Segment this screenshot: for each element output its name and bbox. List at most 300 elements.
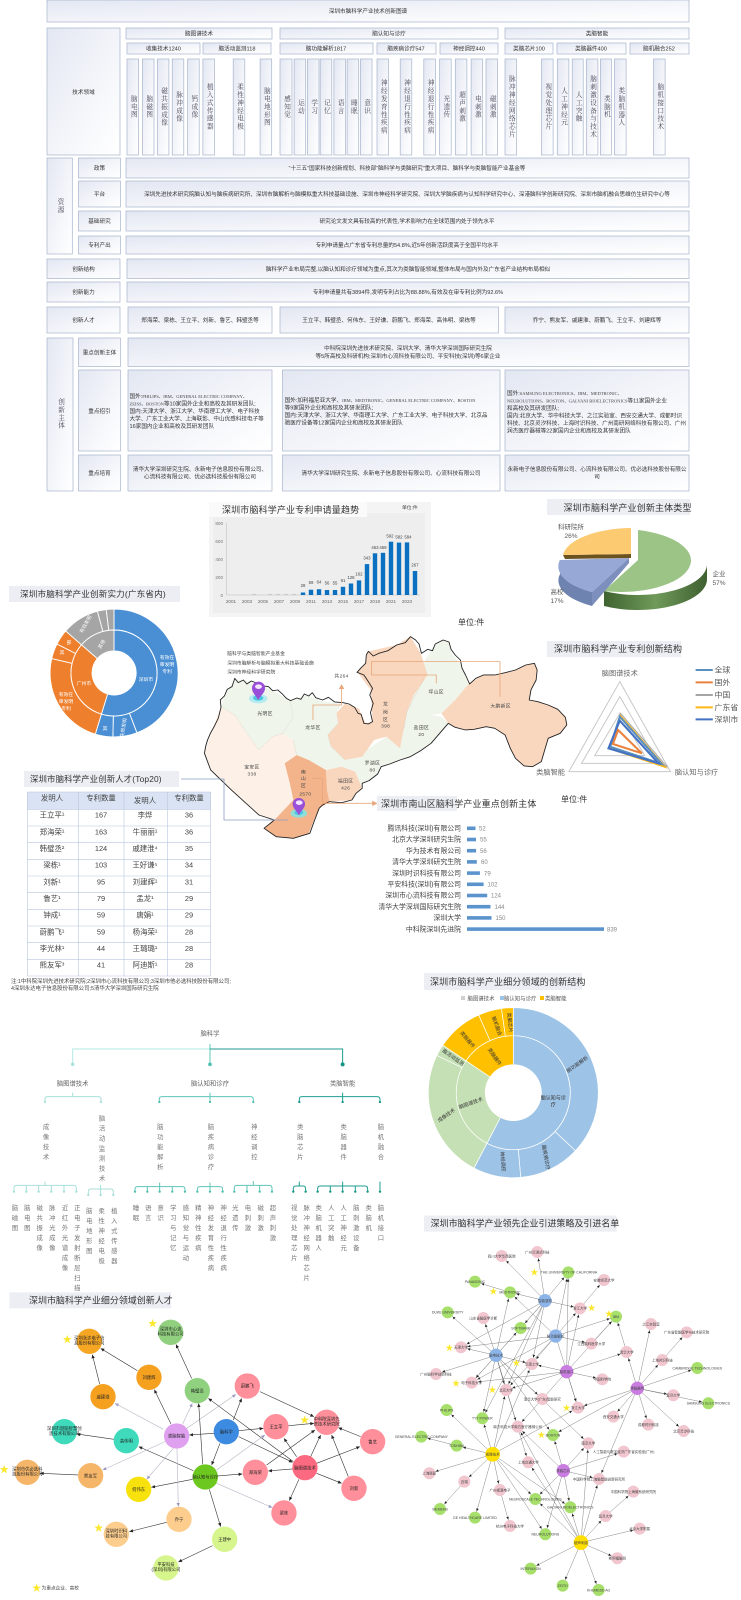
network labels: 脑机接口 xyxy=(560,1369,574,1374)
panel: innovation entities: 心流科技有限公司、优必选科技股份有限公司 xyxy=(144,472,256,480)
network labels: 广州视源电子 xyxy=(490,1487,511,1492)
panel: innovation entities: NEUROLUTIONS、BOSTON、GALVANI BIOELECTRONICS等11家国外企业 xyxy=(507,396,667,404)
bar chart: Nanshan key entities: 150 xyxy=(496,916,506,922)
panel: innovation talent: 郑海荣、梁栋、王立平、刘新、鲁艺、韩璧丞等 xyxy=(141,316,259,324)
tree diagram: brain science taxonomy: 脑机融合 xyxy=(376,1122,384,1163)
table: top 20 inventors: 王好谦⁵ xyxy=(132,861,158,870)
tree diagram: brain science taxonomy: 脑活动监测技术 xyxy=(97,1114,105,1185)
network labels: 技有限公司 xyxy=(106,1533,127,1540)
tree diagram: brain science taxonomy: 植入式传感器 xyxy=(110,1206,117,1268)
pie chart: innovation entity types: 26% xyxy=(564,533,578,540)
network labels: 之江实验室 xyxy=(642,1321,660,1326)
tree diagram: brain science taxonomy: 正电子发射断层扫描 xyxy=(73,1204,80,1294)
panel: innovation talent: 创新人才 xyxy=(72,316,95,324)
tree diagram: brain science taxonomy: 柔性神经电极 xyxy=(97,1206,104,1268)
legend: 脑图谱技术 xyxy=(468,994,495,1002)
panel: resources: 研究论文发文具有较高的代表性,学术影响力在全球范围内处于领先水平 xyxy=(320,217,495,225)
bar chart: Nanshan key entities: 平安科技(深圳)有限公司 xyxy=(388,880,461,888)
tree diagram: brain science taxonomy: 人工神经元 xyxy=(339,1204,346,1254)
heading: entity types: 深圳市脑科学产业创新主体类型 xyxy=(564,502,692,513)
network labels: 成像技术 xyxy=(486,1452,500,1457)
network labels: 戚建淮 xyxy=(96,1393,110,1400)
panel: innovation talent xyxy=(47,307,689,333)
network labels: 上海交通大学 xyxy=(518,1460,539,1465)
pie chart: innovation entity types: 57% xyxy=(712,580,726,587)
tree diagram: brain science taxonomy: 类脑智能 xyxy=(330,1078,356,1087)
panel: technology fields: 磁刺激 xyxy=(488,94,497,119)
network labels: 智能感知 xyxy=(538,1298,552,1303)
network labels: PHILIPS xyxy=(440,1408,454,1412)
network labels: 斯坦福脑研 xyxy=(609,1556,627,1561)
table: top 20 inventors: 郑海荣¹ xyxy=(40,827,65,836)
network labels: 南方科技大学南方医疗器械公司 xyxy=(493,1424,543,1429)
bar chart: Nanshan key entities xyxy=(377,796,618,933)
tree diagram: brain science taxonomy: 光遗传 xyxy=(231,1203,238,1234)
bar chart: Nanshan key entities: 56 xyxy=(480,849,487,855)
tree diagram: brain science taxonomy: 人工突触 xyxy=(327,1204,334,1244)
radar chart: patent innovation structure: 类脑智能 xyxy=(536,767,565,776)
bar chart: patent application trend: 584 xyxy=(404,534,412,540)
panel: innovation talent: 乔宁、熊友军、戚建淮、蔚鹏飞、王立平、刘建辉等 xyxy=(533,316,662,324)
tree diagram: brain science taxonomy: 脑机接口 xyxy=(376,1203,384,1244)
panel: technology fields: 磁共振成像 xyxy=(160,86,168,127)
table: top 20 inventors: 阿迪斯¹ xyxy=(133,961,158,970)
network labels: 深圳市优必选科 xyxy=(12,1466,43,1473)
panel: technology fields xyxy=(47,28,689,155)
bar chart: patent application trend: 582 xyxy=(395,534,403,540)
sunburst: subfield innovation structure: 神经调控 xyxy=(498,1151,507,1172)
bar chart: patent application trend: 单位:件 xyxy=(402,504,418,511)
icons: key enterprise stars: ★ xyxy=(588,1304,596,1313)
district labels: 岗 xyxy=(383,708,388,715)
icon: map pin Nanshan xyxy=(291,798,307,818)
panel: innovation entities: 国内:天津大学、浙江大学、华南理工大学、广东工业大学、电子科技大学、北京品 xyxy=(285,411,488,419)
panel: innovation entities: 驰医疗设备等12家国内企业和高校及其研发团队 xyxy=(285,418,403,426)
panel: innovation entities: 清华大学深圳研究生院、永新电子信息股份有限公司、心流科技有限公司 xyxy=(301,469,481,477)
panel: innovation entities: 永新电子信息股份有限公司、心流科技有限公司、优必选科技股份有限公 xyxy=(507,465,687,473)
bar chart: Nanshan key entities: 102 xyxy=(488,882,498,888)
radar chart: patent innovation structure: 脑认知与诊疗 xyxy=(675,767,718,776)
panel: innovation entities: 清华大学深圳研究生院、永新电子信息股份有限公司、 xyxy=(133,465,267,473)
tree diagram: brain science taxonomy: 类脑芯片 xyxy=(296,1122,303,1163)
tree diagram: brain science taxonomy: 学习与记忆 xyxy=(169,1203,176,1254)
bar chart: patent application trend: 0 xyxy=(220,593,223,598)
tree diagram: brain science taxonomy: 磁刺激 xyxy=(256,1203,263,1234)
panel: technology fields: 脑电图 xyxy=(129,94,138,119)
footnote: 4深圳永达电子信息股份有限公司;5清华大学深圳国际研究生院 xyxy=(11,984,159,992)
network labels: 南京大学 xyxy=(581,1441,596,1446)
bar chart: patent application trend: 2011 xyxy=(306,599,316,604)
tree diagram: brain science taxonomy: 语言 xyxy=(144,1203,151,1224)
tree diagram: brain science taxonomy: 脑磁图 xyxy=(10,1203,18,1234)
sunburst: innovation strength in Guangdong: 有效发明 xyxy=(78,614,94,634)
network labels: 类脑智能 xyxy=(168,1433,186,1440)
network labels: IBM xyxy=(613,1315,619,1319)
sunburst: subfield innovation structure: 成像技术 xyxy=(436,1107,457,1124)
district labels: 80 xyxy=(370,768,376,774)
table: top 20 inventors: 34 xyxy=(185,861,193,870)
radar chart: patent innovation structure: 全球 xyxy=(715,665,731,675)
district labels: 区 xyxy=(383,717,388,723)
icon: map pin Guangming xyxy=(249,682,267,703)
sunburst: subfield innovation structure xyxy=(424,973,598,1178)
bar chart: patent application trend: 2017 xyxy=(354,599,365,604)
legend: 脑认知与诊疗 xyxy=(504,994,537,1002)
table: top 20 inventors: 29 xyxy=(185,911,193,920)
table: top 20 inventors: 孟龙¹ xyxy=(136,894,154,903)
panel: technology fields: 神经发育性疾病 xyxy=(379,78,388,135)
panel: technology fields: 学习 xyxy=(310,98,318,115)
panel: technology fields: 人工神经元 xyxy=(560,86,568,127)
table: top 20 inventors: 王璐璐¹ xyxy=(133,944,158,953)
network labels: 进技术研究院 xyxy=(314,1421,340,1428)
heading: Nanshan xyxy=(377,796,537,811)
table: top 20 inventors: 发明人 xyxy=(134,796,157,805)
district labels: 山 xyxy=(301,775,306,782)
network labels: 类脑芯片 xyxy=(556,1468,571,1473)
network: leading enterprises introduction list xyxy=(395,1216,731,1596)
bar chart: Nanshan key entities: 北京大学深圳研究生院 xyxy=(392,835,461,844)
network labels: 中国科学院上海微系统研究院 xyxy=(611,1489,656,1494)
network labels: 深圳市韶脑智慧创 xyxy=(47,1425,82,1432)
panel: innovation entities: 重点招引 xyxy=(88,407,111,415)
pie chart: innovation entity types: 企业 xyxy=(712,569,726,578)
panel: innovation entities: 16家国内企业和高校及其研发团队 xyxy=(130,422,214,430)
network labels: PANASONIC xyxy=(465,1280,486,1284)
network labels: 山东省脑医学诊断 xyxy=(469,1315,498,1320)
bar chart: patent application trend: 64 xyxy=(317,580,322,584)
tree diagram: brain science taxonomy: 脉冲神经网络芯片 xyxy=(302,1203,309,1284)
network labels: 梁栋 xyxy=(280,1510,289,1517)
district labels: 光明区 xyxy=(257,710,273,717)
sunburst: innovation strength in Guangdong: 专利 xyxy=(162,668,172,675)
legend: star meaning: ★ xyxy=(32,1583,41,1593)
panel: technology fields: 人工突触 xyxy=(574,90,582,123)
sunburst: innovation strength in Guangdong: 审发明 xyxy=(160,661,174,668)
network labels: DUKE UNIVERSITY xyxy=(432,1311,464,1315)
district labels: 大鹏新区 xyxy=(490,702,511,709)
sunburst: subfield innovation structure: 脑机融合 xyxy=(490,1016,503,1037)
pie chart: innovation entity types: 17% xyxy=(550,598,564,605)
panel: innovation entities: 创新主体 xyxy=(56,397,65,430)
network labels: 广州脑科学创新科技 xyxy=(420,1371,452,1376)
network labels: 电子科技大学 xyxy=(461,1380,483,1385)
network labels: BOSTON xyxy=(546,1433,561,1437)
icons: key enterprise stars xyxy=(0,1319,309,1533)
heading: radar xyxy=(547,641,682,657)
network labels: KHUMEDE AG xyxy=(587,1588,611,1592)
panel: technology fields: 类脑机器人 xyxy=(617,86,625,127)
table: top 20 inventors: 专利数量 xyxy=(174,794,204,802)
bar chart: Nanshan key entities: 中科院深圳先进院 xyxy=(406,924,461,933)
tree diagram: brain science taxonomy: 脑电地形图 xyxy=(85,1206,92,1258)
network labels: 蔚鹏飞 xyxy=(241,1383,254,1390)
panel: technology fields: 脉冲神经网络芯片 xyxy=(507,74,516,139)
pie chart: innovation entity types xyxy=(547,499,726,610)
network labels: 北京大学附属 xyxy=(629,1526,651,1531)
heading: subfield structure: 深圳市脑科学产业细分领域的创新结构 xyxy=(430,976,586,987)
network labels: 上海联影 xyxy=(422,1471,437,1476)
district: Longgang xyxy=(328,637,428,760)
tree diagram: brain science taxonomy: 脑图谱技术 xyxy=(57,1078,89,1087)
panel: technology fields: 类脑机 xyxy=(602,94,611,119)
panel: innovation capability xyxy=(47,282,689,302)
network labels: 深圳永达电子信 xyxy=(74,1335,105,1342)
tree diagram: brain science taxonomy: 脑疾病诊疗 xyxy=(206,1122,214,1173)
table: top 20 inventors: 167 xyxy=(95,811,107,820)
panel: resources: 深圳先进技术研究院脑认知与脑疾病研究所、深圳市脑解析与脑模拟重大科技基础设施、深圳市神经科学研究院、深圳大学脑疾病与认知科学研究中心、深港脑科学创新研究院、深圳市脑机融合思维仿生研究中心等 xyxy=(144,190,670,198)
bar chart: Nanshan key entities: 深圳大学 xyxy=(433,913,461,922)
icons: key enterprise stars: ★ xyxy=(148,1319,157,1329)
sunburst: subfield innovation structure: 类脑芯片 xyxy=(505,1012,514,1033)
bar chart: patent application trend: 592 xyxy=(386,534,394,538)
tree diagram: brain science taxonomy: 成像技术 xyxy=(41,1122,49,1163)
table: top 20 inventors: 王立平¹ xyxy=(40,811,65,820)
panel: technology fields: 类脑智能 xyxy=(586,30,609,38)
table: top 20 inventors: 刘建辉¹ xyxy=(133,877,158,886)
network labels: 深圳市心流 xyxy=(160,1326,182,1333)
sunburst: innovation strength in Guangdong: 专利 xyxy=(61,705,71,712)
radar chart: patent innovation structure: 广东省 xyxy=(715,702,738,712)
network labels: 人工智能与数字经济广东省实验室(广州) xyxy=(593,1449,654,1454)
tree diagram: brain science taxonomy: 脑功能解析 xyxy=(156,1122,163,1173)
district labels: 盐田区 xyxy=(414,724,429,731)
panel: innovation entities: ZEISS、BOSTON等10家国外企业和高校及其研发团队; xyxy=(130,400,256,408)
annotation: Guangming facilities: 脑科学与类脑智能产业基金 xyxy=(227,650,285,657)
network labels: 清华大学 xyxy=(620,1349,634,1354)
network labels: 平安科技 xyxy=(157,1561,175,1568)
bar chart: patent application trend: 28 xyxy=(301,583,306,588)
tree diagram: brain science taxonomy: 脉冲光成像 xyxy=(48,1203,55,1254)
panel: technology fields: 脑图谱技术 xyxy=(185,30,213,38)
network labels: 王立平 xyxy=(269,1423,283,1430)
network labels: 脑图谱技术 xyxy=(294,1464,316,1471)
tree diagram: brain science taxonomy: 神经退行性疾病 xyxy=(219,1203,226,1274)
bar chart: patent application trend: 600 xyxy=(215,539,223,544)
table: top 20 inventors: 专利数量 xyxy=(86,794,116,802)
panel: innovation entities: 国外:加利福尼亚大学、IBM、MEDTRONIC、GENERAL ELECTRIC COMPANY、BOSTON xyxy=(285,396,476,404)
panel: technology fields: 运动 xyxy=(296,99,305,115)
network labels: 浙江大学 xyxy=(571,1405,585,1410)
panel: innovation entities: 等5所高校及科研机构;深圳市心流科技有限公司、平安科技(深圳)等6家企业 xyxy=(316,352,501,360)
panel: technology fields: 类脑器件400 xyxy=(575,44,607,52)
sunburst: innovation strength in Guangdong: 有效在 xyxy=(59,691,73,698)
network labels: 天津大学 xyxy=(454,1345,468,1350)
bar chart: patent application trend: 2021 xyxy=(386,599,397,604)
heading: strength xyxy=(9,586,180,602)
network labels xyxy=(395,1249,731,1592)
radar chart: patent innovation structure: 脑图谱技术 xyxy=(602,668,638,677)
panel: innovation entities: 司 xyxy=(594,474,600,480)
district labels xyxy=(244,673,511,798)
table: top 20 inventors: 31 xyxy=(185,877,193,886)
network labels: 脑电技术 xyxy=(489,1353,503,1358)
tree diagram: brain science taxonomy xyxy=(10,1028,384,1294)
sunburst: innovation strength in Guangdong: 有效在 xyxy=(160,654,174,661)
panel: innovation entities: 大学、广东工业大学、上海联影、中山优感科技电子等 xyxy=(130,414,264,422)
panel: technology fields: 超声刺激 xyxy=(458,90,466,123)
bar chart: patent application trend: 91 xyxy=(341,578,346,583)
icons: key enterprise stars: ★ xyxy=(563,1404,571,1413)
network labels: 四川大学华西医院 xyxy=(488,1253,516,1258)
panel: innovation entities: 国外:PHILIPS、IBM、GENERAL ELECTRIC COMPANY、 xyxy=(130,392,247,400)
network labels: 息股份有限公司 xyxy=(74,1340,104,1347)
bar chart: patent application trend xyxy=(209,502,431,617)
bar chart: patent application trend: 343 xyxy=(363,556,371,560)
panel: technology fields: 脑刺激设备与技术 xyxy=(589,74,597,139)
network labels: GENERAL ELECTRIC COMPANY xyxy=(395,1435,449,1439)
table: top 20 inventors: 李光林¹ xyxy=(40,944,65,953)
network labels: INTERAXON xyxy=(520,1567,541,1571)
network labels: 华南工学 xyxy=(525,1361,539,1366)
radar chart: patent innovation structure: 中国 xyxy=(715,690,731,700)
legend: star meaning: 为重点企业、高校 xyxy=(42,1584,79,1591)
panel: innovation entities: 和高校及其研发团队; xyxy=(507,404,559,412)
bar chart: patent application trend: 2009 xyxy=(290,599,301,604)
heading: inventors: 深圳市脑科学产业创新人才(Top20) xyxy=(30,774,162,784)
district: Nanshan xyxy=(264,755,329,838)
bar chart: patent application trend: 59 xyxy=(309,580,314,585)
network labels: 深圳时识科 xyxy=(106,1528,128,1535)
network labels: NEUROSCALE TECHNOLOGIES xyxy=(509,1497,562,1501)
network labels: 广州沉浸式科技 xyxy=(525,1249,550,1254)
district labels: 龙华区 xyxy=(305,724,321,731)
sunburst: subfield innovation structure: 脑功能解析 xyxy=(565,1054,590,1075)
heading: entity types xyxy=(547,499,692,515)
radar chart: patent innovation structure: 国外 xyxy=(715,677,731,687)
icons: key enterprise stars: ★ xyxy=(530,1268,538,1277)
sunburst: subfield innovation structure: 脑认知与诊 xyxy=(541,1095,566,1102)
bar chart: patent application trend: 55 xyxy=(333,580,338,586)
district: Pingshan xyxy=(407,640,469,715)
network labels: 刘建辉 xyxy=(142,1374,156,1381)
network edges xyxy=(40,1344,361,1562)
bar chart: Nanshan key entities: 华为技术有限公司 xyxy=(406,846,461,855)
bar chart: patent application trend: 2005 xyxy=(258,599,269,604)
tree diagram: brain science taxonomy: 意识 xyxy=(156,1203,163,1224)
network labels: 鲁艺 xyxy=(368,1438,378,1445)
heading: subfield talent: 深圳市脑科学产业细分领域创新人才 xyxy=(29,1294,173,1305)
panel: resources: “十三五”国家科技创新规划、科技部“脑科学与类脑研究”重大项目、脑科学与类脑智能产业基金等 xyxy=(289,164,526,172)
panel: technology fields: 技术领域 xyxy=(72,88,95,96)
network labels: 刘新 xyxy=(350,1485,359,1492)
panel: technology fields: 钙成像 xyxy=(190,94,198,119)
panel: technology fields: 植入式传感器 xyxy=(205,82,213,131)
heading: introduction list: 深圳市脑科学产业领先企业引进策略及引进名单 xyxy=(431,1218,619,1229)
panel: technology fields: 记忆 xyxy=(322,98,331,115)
bar chart: patent application trend: 400 xyxy=(215,557,223,562)
bar chart: Nanshan key entities: 55 xyxy=(480,838,487,844)
network labels: MEDTRONIC xyxy=(499,1291,521,1295)
pie chart: innovation entity types: 高校 xyxy=(550,587,564,596)
tree diagram: brain science taxonomy: 精神性疾病 xyxy=(194,1203,201,1254)
table: top 20 inventors: 103 xyxy=(95,861,107,870)
network labels: 熊友军 xyxy=(84,1472,98,1479)
network labels: 郑海荣 xyxy=(249,1469,262,1476)
network labels: 王建中 xyxy=(218,1536,231,1543)
network labels: 清华大学(广东)智能研究 xyxy=(524,1396,561,1401)
panel: resources: 资源 xyxy=(56,197,64,214)
icons: key enterprise stars: ★ xyxy=(489,1287,497,1296)
network labels: 中国科学院 xyxy=(594,1377,612,1382)
heading: Nanshan: 深圳市南山区脑科学产业重点创新主体 xyxy=(381,798,537,809)
district labels: 共264 xyxy=(334,673,349,680)
icons: key enterprise stars: ★ xyxy=(445,1343,453,1352)
tree diagram: brain science taxonomy: 脑认知和诊疗 xyxy=(191,1078,230,1087)
network labels: 复旦大学 xyxy=(599,1513,613,1518)
network labels: GE HEALTHCARE LIMITED xyxy=(453,1516,497,1520)
table: top 20 inventors: 28 xyxy=(185,927,193,936)
heading: subfield structure xyxy=(424,973,586,990)
network labels: 广东省智能医学与技术研究院 xyxy=(664,1330,710,1335)
panel: resources: 政策 xyxy=(94,164,105,172)
panel: resources xyxy=(47,158,689,254)
panel: technology fields: 柔性神经电极 xyxy=(236,82,244,131)
network labels: 北京灵汐科技 xyxy=(673,1428,695,1433)
panel: technology fields: 脑磁图 xyxy=(145,94,153,119)
district labels: 338 xyxy=(247,771,257,777)
network labels: 思技术有限公司 xyxy=(49,1430,79,1437)
tree diagram: brain science taxonomy: 类脑器件 xyxy=(339,1122,346,1163)
network nodes xyxy=(415,1246,714,1596)
icons: key enterprise stars: ★ xyxy=(488,1385,496,1394)
bar chart: Nanshan key entities: 144 xyxy=(494,905,505,911)
network labels: (深圳)有限公司 xyxy=(152,1566,180,1573)
tree diagram: brain science taxonomy: 感知觉与运动 xyxy=(181,1203,189,1264)
table: top 20 inventors: 戚建淮⁴ xyxy=(132,844,158,853)
bar chart: patent application trend: 128 xyxy=(347,575,355,580)
bar chart: Nanshan key entities: 深圳时识科技有限公司 xyxy=(392,868,461,877)
table: top 20 inventors: 韩璧丞² xyxy=(40,844,65,853)
bar chart: patent application trend: 267 xyxy=(411,562,419,568)
tree diagram: brain science taxonomy: 视觉处理芯片 xyxy=(290,1203,297,1264)
table: top 20 inventors: 79 xyxy=(97,894,105,903)
panel: technology fields: 脑电地形图 xyxy=(262,86,271,127)
network labels: 何伟东 xyxy=(132,1486,146,1493)
network labels: TYT POWER xyxy=(472,1417,493,1421)
network labels: 高伟明 xyxy=(120,1437,133,1444)
panel: innovation capability: 创新能力 xyxy=(72,288,95,296)
panel: innovation structure: 创新结构 xyxy=(72,265,95,273)
tree diagram: brain science taxonomy: 超声刺激 xyxy=(268,1203,276,1244)
panel: technology fields: 睡眠 xyxy=(349,98,358,115)
bar chart: patent application trend: 2015 xyxy=(338,599,349,604)
panel: technology fields: 脑机融合252 xyxy=(643,44,675,52)
panel: resources: 专利申请量占广东省专利总量的54.8%,近5年创新活跃度高于全国平均水平 xyxy=(316,241,499,249)
panel: technology innovation map xyxy=(47,0,689,491)
title: 深圳市脑科学产业技术创新图谱 xyxy=(329,7,408,15)
panel: resources: 平台 xyxy=(94,190,105,198)
tree diagram: brain science taxonomy: 类脑机器人 xyxy=(314,1203,321,1254)
tree diagram: brain science taxonomy: 神经调控 xyxy=(250,1122,257,1163)
panel: technology fields: 意识 xyxy=(363,99,371,115)
bar chart: patent application trend: 2001 xyxy=(226,599,237,604)
panel: resources: 基础研究 xyxy=(88,217,111,225)
icons: key enterprise stars: ★ xyxy=(94,1523,103,1533)
table: top 20 inventors: 41 xyxy=(97,961,105,970)
tree diagram: brain science taxonomy: 磁共振成像 xyxy=(35,1203,42,1254)
network labels: SIEMENS xyxy=(432,1507,449,1511)
panel: technology fields: 脑活动监测118 xyxy=(219,44,255,52)
network labels: 江西脑科医学大学 xyxy=(577,1341,606,1346)
bar chart: patent application trend: 463 xyxy=(371,545,379,550)
district labels: 区 xyxy=(301,783,306,789)
icons: key enterprise stars xyxy=(445,1268,613,1440)
table: top 20 inventors: 29 xyxy=(185,894,193,903)
unit label: 单位:件 xyxy=(561,794,587,804)
network labels: 中国科学院上海脑智能创新研究所 xyxy=(573,1476,626,1481)
legend: 类脑智能 xyxy=(545,994,567,1002)
